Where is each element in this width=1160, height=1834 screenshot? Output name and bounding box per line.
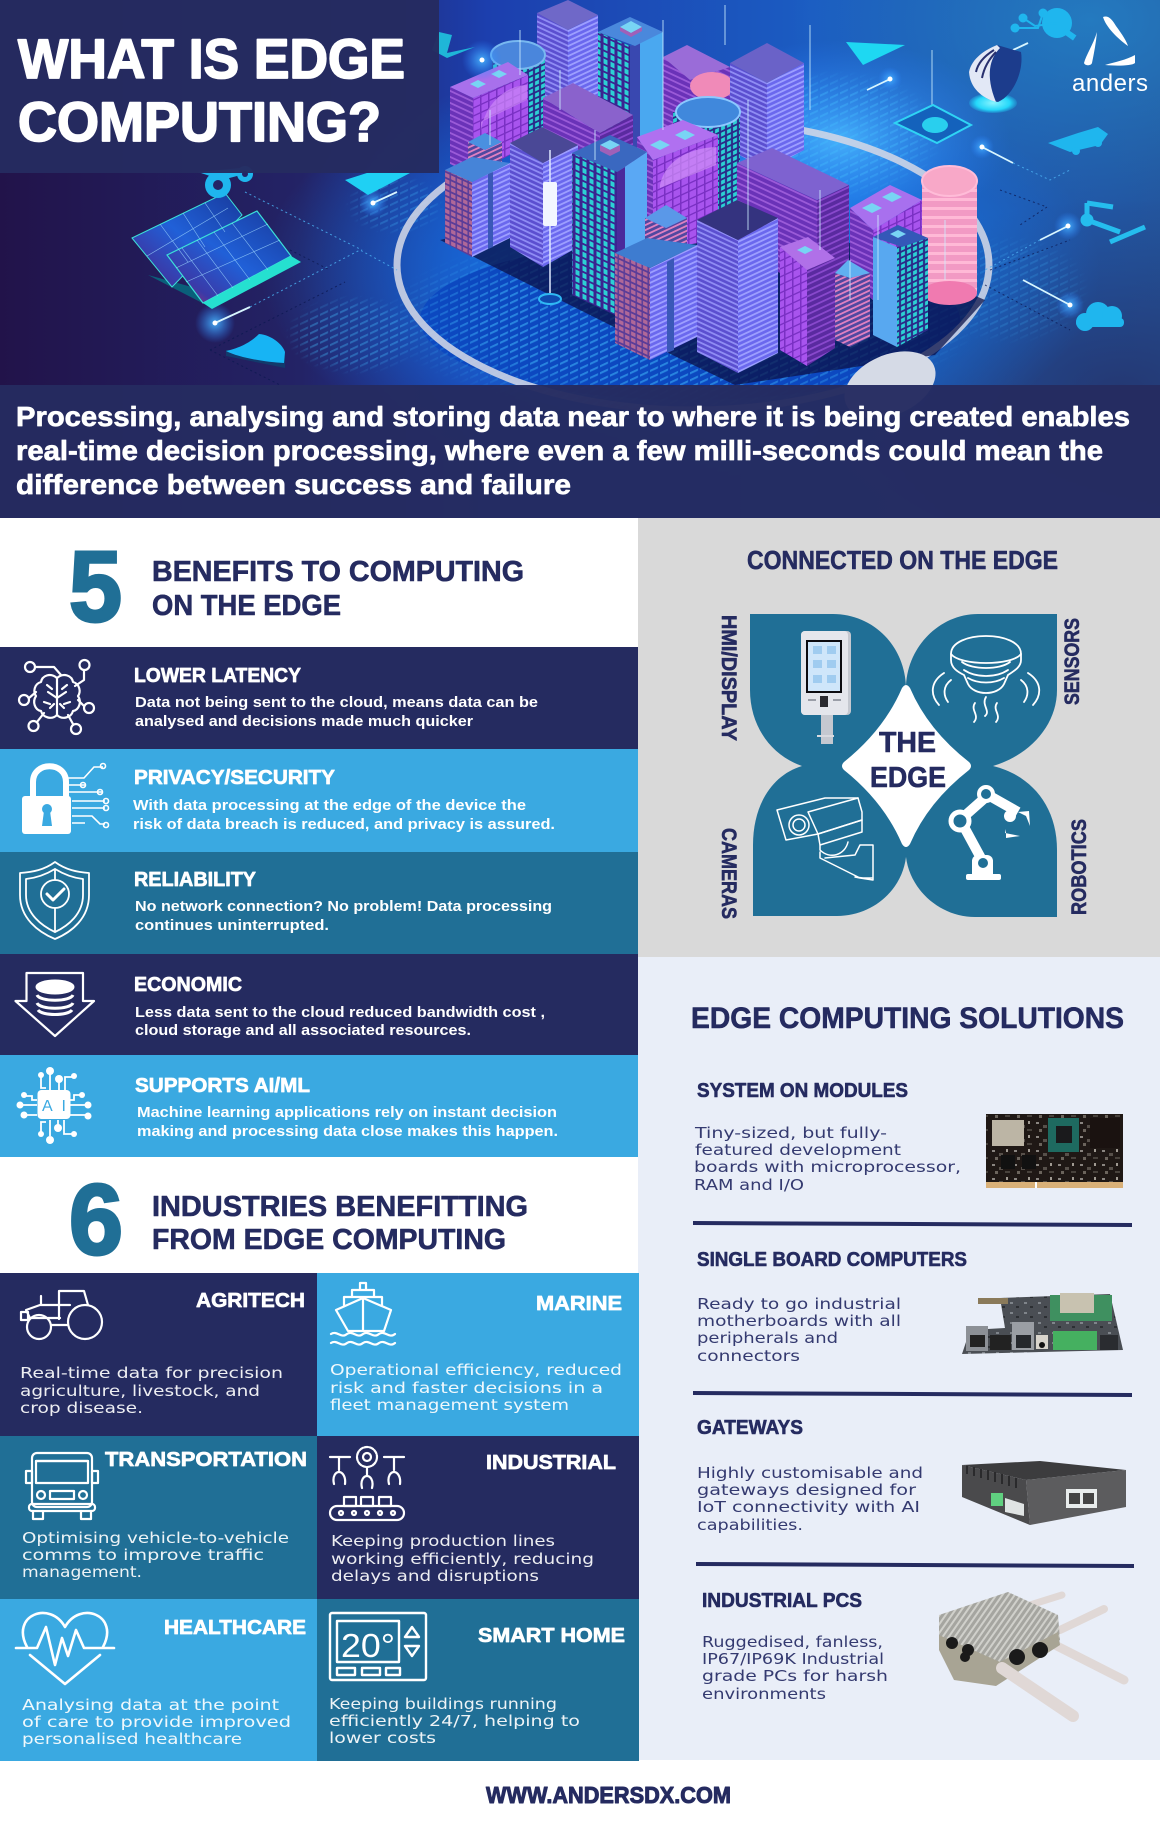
row: economic xyxy=(0,954,638,1055)
icon: shield with glow xyxy=(969,45,1022,113)
antenna pole xyxy=(539,150,561,304)
description xyxy=(697,1464,923,1534)
intro text: real-time decision processing, where even a few milli-seconds could mean the xyxy=(16,435,1103,466)
text: economic: ECONOMIC xyxy=(134,974,242,996)
card: marine xyxy=(317,1273,639,1436)
text: marine xyxy=(330,1293,622,1414)
text: marine: risk and faster decisions in a xyxy=(330,1379,603,1397)
solution: single board computers: SINGLE BOARD COMPUTERS xyxy=(697,1249,967,1271)
text: supports AI/ML: making and processing data close makes this happen. xyxy=(137,1123,558,1140)
text: smart home: Keeping buildings running xyxy=(329,1695,557,1713)
icon: shield check xyxy=(20,862,89,939)
text: agritech xyxy=(20,1290,305,1417)
description: boards with microprocessor, xyxy=(694,1158,961,1176)
text: smart home: lower costs xyxy=(329,1729,436,1747)
divider 2 xyxy=(693,1393,1132,1395)
title panel xyxy=(0,0,439,173)
text: agritech: AGRITECH xyxy=(196,1290,305,1312)
heading: connected: CONNECTED ON THE EDGE xyxy=(747,545,1058,575)
text: healthcare: of care to provide improved xyxy=(22,1713,291,1731)
description xyxy=(697,1295,901,1365)
logo: anders xyxy=(1072,16,1148,97)
icon: brain network xyxy=(19,660,94,734)
heading: industries xyxy=(152,1191,528,1256)
text: healthcare: HEALTHCARE xyxy=(164,1617,306,1639)
card: healthcare xyxy=(0,1599,317,1761)
icon: thermostat xyxy=(330,1613,426,1680)
label: cameras: CAMERAS xyxy=(717,828,740,919)
white ring xyxy=(397,120,989,410)
row: lower latency xyxy=(0,647,638,749)
solution: system on modules: SYSTEM ON MODULES xyxy=(697,1080,908,1102)
text: transportation: Optimising vehicle-to-vehicle xyxy=(22,1529,289,1547)
image: gateway box xyxy=(962,1461,1126,1525)
title: COMPUTING? xyxy=(18,90,381,153)
skyscrapers xyxy=(445,0,977,373)
image: rugged industrial PC xyxy=(939,1592,1124,1716)
label: the edge: EDGE xyxy=(870,762,946,794)
text: smart home: efficiently 24/7, helping to xyxy=(329,1712,580,1730)
description: Ruggedised, fanless, xyxy=(702,1633,883,1651)
row: supports AI/ML xyxy=(0,1055,638,1157)
description: Tiny-sized, but fully- xyxy=(694,1124,887,1142)
title xyxy=(18,27,405,153)
text: lower latency: LOWER LATENCY xyxy=(134,665,302,687)
icon: factory conveyor xyxy=(330,1447,404,1520)
label: robotics: ROBOTICS xyxy=(1068,819,1091,915)
text: economic: Less data sent to the cloud reduced bandwidth cost , xyxy=(135,1004,545,1021)
icon: padlock circuit xyxy=(22,764,108,834)
solution: industrial PCs xyxy=(702,1590,1124,1716)
big number 6: 6 xyxy=(69,1164,123,1276)
text: smart home xyxy=(329,1625,625,1747)
heading: benefits xyxy=(152,556,524,622)
big number 5: 5 xyxy=(69,531,122,643)
icon: circuit board xyxy=(345,172,410,195)
icon: robot arm xyxy=(1083,203,1145,242)
icon: thermostat: 20° xyxy=(341,1627,395,1664)
text: transportation: comms to improve traffic xyxy=(22,1546,264,1564)
text: supports AI/ML: SUPPORTS AI/ML xyxy=(135,1075,310,1097)
solution: single board computers xyxy=(697,1249,1123,1365)
icon: AI chip: AI xyxy=(42,1098,66,1115)
text: privacy/security xyxy=(133,767,555,833)
heading: industries: FROM EDGE COMPUTING xyxy=(152,1224,506,1256)
text: industrial: Keeping production lines xyxy=(331,1532,555,1550)
dashed network lines xyxy=(210,163,1070,385)
intro text: Processing, analysing and storing data near to where it is being created enables xyxy=(16,401,1130,432)
icon: down arrow with coins xyxy=(16,973,94,1036)
text: industrial: working efficiently, reducing xyxy=(331,1550,594,1568)
text: marine: fleet management system xyxy=(330,1396,569,1414)
text: transportation: TRANSPORTATION xyxy=(105,1449,307,1471)
description: Ready to go industrial xyxy=(697,1295,901,1313)
text: economic xyxy=(134,974,545,1039)
icon: smoke sensor xyxy=(933,636,1039,722)
image: single board computer xyxy=(962,1293,1123,1354)
icon: AI chip xyxy=(16,1067,92,1144)
description: connectors xyxy=(697,1347,800,1365)
icon: ship xyxy=(331,1283,395,1345)
icon: washing machine xyxy=(895,105,971,143)
description xyxy=(694,1124,961,1194)
satellite dish xyxy=(834,338,946,432)
hero illustration: isometric smart city xyxy=(0,0,1160,385)
solution: industrial PCs: INDUSTRIAL PCS xyxy=(702,1590,862,1612)
panel: edge computing solutions xyxy=(638,957,1160,1760)
icon: tractor xyxy=(198,166,253,198)
heading: industries: INDUSTRIES BENEFITTING xyxy=(152,1191,528,1223)
text: economic: cloud storage and all associated resources. xyxy=(135,1022,471,1039)
image: system on module board xyxy=(986,1114,1123,1188)
solution: gateways xyxy=(697,1417,1126,1534)
divider 3 xyxy=(696,1564,1134,1566)
icon: security camera xyxy=(777,798,873,880)
four-petal diagram xyxy=(750,614,1057,917)
icon: bus xyxy=(26,1453,98,1519)
label: the edge xyxy=(870,727,946,794)
logo: anders: anders xyxy=(1072,70,1148,97)
description: grade PCs for harsh xyxy=(702,1667,888,1685)
text: privacy/security: With data processing at the edge of the device the xyxy=(133,797,526,814)
description: motherboards with all xyxy=(697,1312,901,1330)
text: transportation: management. xyxy=(22,1563,142,1581)
text: supports AI/ML: Machine learning applications rely on instant decision xyxy=(137,1104,557,1121)
text: lower latency xyxy=(134,665,538,730)
intro band xyxy=(0,385,1160,518)
icon: tractor xyxy=(21,1291,102,1339)
text: healthcare: personalised healthcare xyxy=(22,1730,242,1748)
footer: website: WWW.ANDERSDX.COM xyxy=(486,1782,731,1808)
description: environments xyxy=(702,1685,826,1703)
card: smart home xyxy=(317,1599,639,1761)
row: reliability xyxy=(0,852,638,954)
label: the edge: THE xyxy=(879,727,936,759)
panel: connected on the edge xyxy=(638,518,1160,957)
text: industrial xyxy=(331,1452,616,1585)
icon: heart pulse xyxy=(16,1613,114,1684)
icon: cloud xyxy=(1076,302,1124,331)
text: lower latency: Data not being sent to the cloud, means data can be xyxy=(135,694,538,711)
text: reliability xyxy=(134,869,552,934)
panel: 5 benefits xyxy=(0,531,638,1157)
building shadow xyxy=(440,180,985,385)
intro text xyxy=(16,401,1130,500)
icon: HMI kiosk xyxy=(801,631,851,744)
card: industrial xyxy=(317,1436,639,1599)
icon: solar panels xyxy=(132,193,301,309)
description: featured development xyxy=(695,1141,901,1159)
label: sensors: SENSORS xyxy=(1061,618,1084,705)
description: capabilities. xyxy=(697,1516,803,1534)
icon: security badge xyxy=(226,334,285,368)
text: reliability: RELIABILITY xyxy=(134,869,257,891)
text: agritech: crop disease. xyxy=(20,1399,143,1417)
text: agritech: agriculture, livestock, and xyxy=(20,1382,260,1400)
text: supports AI/ML xyxy=(135,1075,558,1140)
title: WHAT IS EDGE xyxy=(18,27,405,90)
description: IP67/IP69K Industrial xyxy=(702,1650,884,1668)
solution: gateways: GATEWAYS xyxy=(697,1417,803,1439)
data light streams xyxy=(490,5,945,300)
text: transportation xyxy=(22,1449,307,1581)
row: privacy/security xyxy=(0,749,638,852)
card: agritech xyxy=(0,1273,317,1436)
description: peripherals and xyxy=(697,1329,838,1347)
text: smart home: SMART HOME xyxy=(478,1625,625,1647)
description: gateways designed for xyxy=(697,1481,917,1499)
divider 1 xyxy=(693,1223,1132,1225)
icon: truck xyxy=(1048,127,1108,155)
text: privacy/security: PRIVACY/SECURITY xyxy=(134,767,336,789)
description: IoT connectivity with AI xyxy=(697,1498,920,1516)
text: healthcare xyxy=(22,1617,306,1748)
description xyxy=(702,1633,888,1703)
text: privacy/security: risk of data breach is reduced, and privacy is assured. xyxy=(133,816,555,833)
text: marine: Operational efficiency, reduced xyxy=(330,1361,622,1379)
text: agritech: Real-time data for precision xyxy=(20,1364,283,1382)
text: industrial: delays and disruptions xyxy=(331,1567,539,1585)
solution: system on modules xyxy=(694,1080,1123,1194)
heading: benefits: BENEFITS TO COMPUTING xyxy=(152,556,524,588)
description: RAM and I/O xyxy=(694,1176,804,1194)
icon: robot arm xyxy=(951,787,1030,880)
glowing connector lines xyxy=(195,40,1084,343)
icon: bird / drone xyxy=(432,32,475,58)
description: Highly customisable and xyxy=(697,1464,923,1482)
heading: solutions: EDGE COMPUTING SOLUTIONS xyxy=(691,1002,1124,1035)
text: healthcare: Analysing data at the point xyxy=(22,1696,279,1714)
diamond xyxy=(842,685,971,847)
card: transportation xyxy=(0,1436,317,1599)
floor data grid xyxy=(290,78,1078,385)
icon: cyan dish xyxy=(846,42,905,65)
text: reliability: continues uninterrupted. xyxy=(135,917,329,934)
text: marine: MARINE xyxy=(536,1293,622,1315)
icon: molecule bulb xyxy=(1010,8,1076,40)
label: HMI/Display: HMI/DISPLAY xyxy=(717,615,740,741)
panel: 6 industries xyxy=(0,1164,639,1761)
text: lower latency: analysed and decisions made much quicker xyxy=(135,713,473,730)
text: industrial: INDUSTRIAL xyxy=(486,1452,616,1474)
text: reliability: No network connection? No problem! Data processing xyxy=(135,898,552,915)
heading: benefits: ON THE EDGE xyxy=(152,590,341,622)
intro text: difference between success and failure xyxy=(16,469,571,500)
